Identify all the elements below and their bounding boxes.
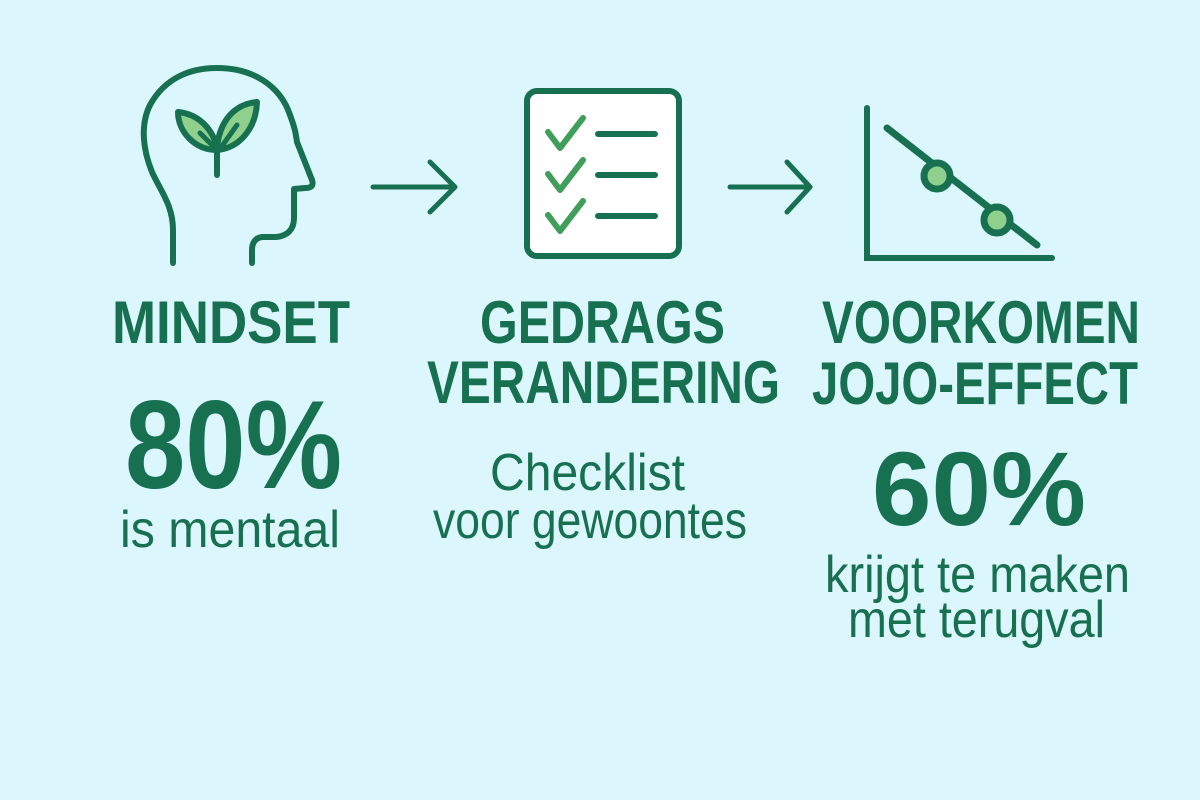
stat: 80%: 80% <box>125 376 342 515</box>
arrow 2 <box>730 162 810 212</box>
arrow 1 <box>373 162 455 212</box>
text: checklist voor gewoontes: voor gewoontes <box>433 492 747 550</box>
heading: gedragsverandering: VERANDERING <box>427 349 780 416</box>
heading: mindset: MINDSET <box>112 289 350 356</box>
icon: head with sprout <box>144 68 313 263</box>
icon: declining chart <box>867 108 1052 258</box>
text: krijgt te maken met terugval <box>825 546 1130 649</box>
stat: 60%: 60% <box>872 431 1086 548</box>
heading: gedragsverandering <box>427 289 780 416</box>
heading: voorkomen jojo-effect <box>812 289 1140 417</box>
heading: gedragsverandering: GEDRAGS <box>480 289 725 356</box>
text: is mentaal: is mentaal <box>120 501 340 559</box>
text: checklist voor gewoontes <box>433 444 747 550</box>
text: checklist voor gewoontes: Checklist <box>490 444 686 502</box>
text: krijgt te maken met terugval: krijgt te maken <box>825 546 1130 604</box>
text: krijgt te maken met terugval: met terugval <box>848 591 1105 649</box>
icon: checklist <box>527 91 679 256</box>
